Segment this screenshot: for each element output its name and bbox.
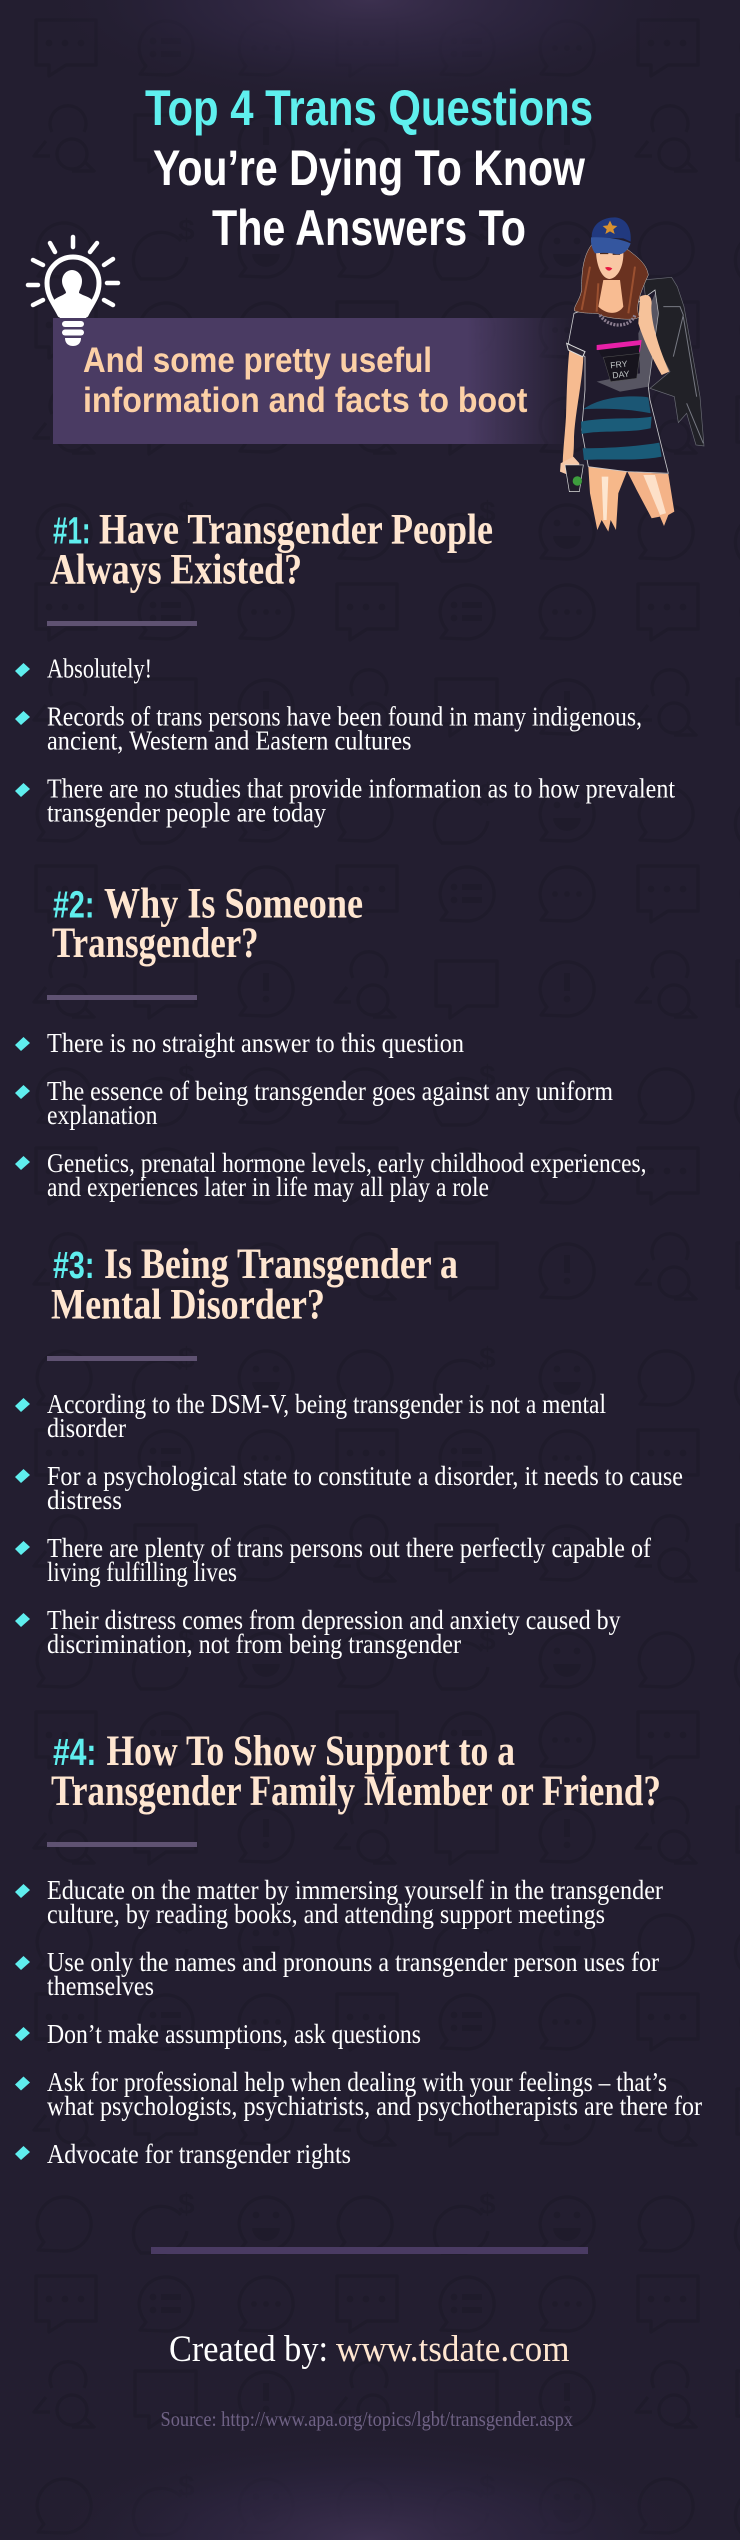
section 3 bullets [15, 1389, 683, 1659]
section 4 bullets: Ask for professional help when dealing with your feelings – that’s [47, 2067, 667, 2097]
section 4 bullets: Advocate for transgender rights [47, 2139, 351, 2169]
section 1 heading: Have Transgender People [99, 506, 493, 554]
credit line: Created by: [169, 2329, 328, 2370]
section 1 bullets: ancient, Western and Eastern cultures [47, 726, 412, 756]
section 3 heading: #3: [53, 1245, 94, 1287]
section 3 bullets: distress [47, 1485, 122, 1515]
panel: subtitle banner: information and facts to boot [83, 381, 528, 420]
illustration: woman in cap and dress [560, 217, 704, 532]
title [145, 80, 593, 256]
illustration: woman in cap and dress: FRY [610, 359, 628, 370]
section 3 heading: Mental Disorder? [51, 1282, 325, 1328]
jacket [643, 277, 704, 446]
neck and face [598, 280, 623, 313]
section 3 bullets: living fulfilling lives [47, 1557, 237, 1587]
section 3 heading: Is Being Transgender a [104, 1241, 458, 1288]
section 1 heading [50, 506, 493, 594]
arm: right [638, 295, 669, 375]
section 1 bullets: transgender people are today [47, 798, 326, 828]
section 4 bullets: Use only the names and pronouns a transgender person uses for [47, 1947, 659, 1977]
panel: subtitle banner: And some pretty useful [83, 341, 432, 380]
section 4 heading: How To Show Support to a [106, 1728, 515, 1775]
section 2 heading [52, 880, 363, 967]
section 2 heading: Why Is Someone [104, 880, 363, 928]
section 2 bullets [15, 1028, 646, 1202]
section 1 heading: Always Existed? [50, 546, 302, 594]
section 2 heading: #2: [53, 884, 94, 926]
credit line: www.tsdate.com [336, 2329, 570, 2370]
section 2 bullets: explanation [47, 1100, 158, 1130]
panel: subtitle banner [53, 318, 571, 444]
section 3 bullets: According to the DSM-V, being transgender is not a mental [47, 1389, 606, 1419]
arm: left [563, 350, 583, 463]
icon: light bulb with person [28, 237, 118, 346]
section 2 bullets: The essence of being transgender goes against any uniform [47, 1076, 613, 1106]
section 3 bullets: disorder [47, 1413, 126, 1443]
section 3 bullets: For a psychological state to constitute a disorder, it needs to cause [47, 1461, 683, 1491]
section 1 heading: #1: [53, 510, 91, 552]
section 3 bullets: Their distress comes from depression and anxiety caused by [47, 1605, 621, 1635]
section 3 heading [51, 1241, 458, 1328]
leg: right [627, 472, 674, 526]
section 1 bullets [15, 654, 675, 828]
section 1 bullets: Absolutely! [47, 654, 152, 684]
dress stripes [583, 396, 651, 413]
pocket with lipsticks [597, 340, 642, 352]
cup and hand [560, 457, 579, 475]
illustration: woman in cap and dress: DAY [612, 369, 630, 380]
section 4 bullets: themselves [47, 1971, 154, 2001]
section 3 bullets: There are plenty of trans persons out there perfectly capable of [47, 1533, 651, 1563]
section 4 heading [51, 1728, 661, 1815]
section 4 bullets: culture, by reading books, and attending support meetings [47, 1899, 605, 1929]
section 3 bullets: discrimination, not from being transgender [47, 1629, 461, 1659]
cap [592, 217, 631, 242]
section 4 bullets: Don’t make assumptions, ask questions [47, 2019, 421, 2049]
title: You’re Dying To Know [153, 140, 585, 196]
dress [568, 290, 668, 473]
leg: left [588, 467, 627, 532]
hair [574, 243, 648, 319]
section 4 bullets [15, 1875, 702, 2169]
source line: Source: http://www.apa.org/topics/lgbt/transgender.aspx [160, 2407, 573, 2431]
necklace [600, 315, 635, 325]
title: Top 4 Trans Questions [145, 80, 593, 136]
section 2 heading: Transgender? [52, 920, 259, 967]
section 2 bullets: Genetics, prenatal hormone levels, early childhood experiences, [47, 1148, 646, 1178]
section 4 heading: #4: [53, 1732, 96, 1774]
section 1 bullets: There are no studies that provide information as to how prevalent [47, 774, 675, 804]
section 2 bullets: and experiences later in life may all play a role [47, 1172, 489, 1202]
section 4 bullets: Educate on the matter by immersing yourself in the transgender [47, 1875, 663, 1905]
section 1 bullets: Records of trans persons have been found in many indigenous, [47, 702, 642, 732]
section 2 bullets: There is no straight answer to this question [47, 1028, 464, 1058]
credit line [169, 2329, 570, 2370]
title: The Answers To [212, 200, 526, 256]
